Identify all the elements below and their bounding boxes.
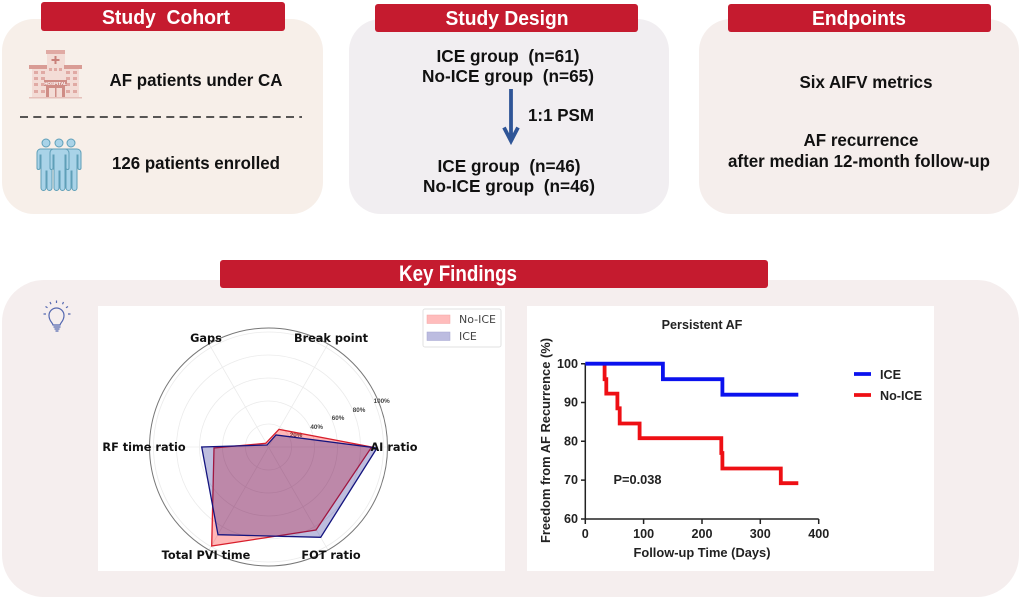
radar series: ICE (202, 435, 377, 537)
icon: hospital: HOSPITAL (44, 81, 67, 86)
p value: P=0.038 (614, 473, 662, 487)
heading: key findings (220, 260, 768, 288)
text: groups before matching (422, 46, 594, 86)
icon: hospital (29, 50, 82, 98)
arrow: propensity score matching (504, 89, 518, 141)
icon: light bulb (44, 300, 70, 331)
text: AF patients under CA: AF patients under CA (110, 70, 283, 90)
text: groups after matching: ICE group (n=46) (438, 156, 580, 176)
y tick labels: 90 (564, 396, 578, 410)
heading: endpoints (728, 4, 991, 32)
x tick labels: 100 (633, 527, 654, 541)
radar axis labels: Total PVI time (162, 549, 251, 562)
radar axis labels: RF time ratio (102, 441, 186, 454)
panel: study cohort (2, 2, 323, 214)
chart legend (854, 368, 922, 403)
icon: group of people (37, 139, 81, 191)
heading: study cohort (41, 2, 285, 31)
x tick labels (582, 527, 829, 541)
heading: endpoints: Endpoints (812, 8, 906, 30)
y axis title: Freedom from AF Recurrence (%) (539, 338, 553, 543)
radial tick labels: 40% (310, 424, 323, 431)
x axis title: Follow-up Time (Days) (634, 546, 770, 560)
radar axis labels: Gaps (190, 332, 222, 345)
survival curve: ICE (585, 364, 798, 395)
x tick labels: 0 (582, 527, 589, 541)
x tick labels: 300 (750, 527, 771, 541)
text: groups before matching: ICE group (n=61) (436, 46, 580, 66)
radial tick labels: 20% (290, 432, 303, 439)
radar legend: No-ICE (459, 313, 496, 326)
text: AF recurrence: after median 12-month follow-up (728, 151, 990, 171)
radar grid (150, 332, 388, 562)
axes with ticks (581, 364, 819, 524)
radar legend (423, 309, 501, 347)
radial tick labels: 60% (332, 415, 345, 422)
text: 126 patients enrolled: 126 patients enrolled (112, 153, 280, 173)
text: six AIFV metrics: Six AIFV metrics (800, 72, 933, 92)
radar axis labels: Break point (294, 332, 369, 345)
survival curve: No-ICE (605, 364, 798, 483)
chart legend: ICE (880, 368, 901, 382)
heading: study design: Study Design (446, 8, 568, 30)
y tick labels: 70 (564, 473, 578, 487)
y tick labels: 80 (564, 434, 578, 448)
panel: radar chart (98, 306, 505, 571)
y tick labels: 60 (564, 512, 578, 526)
heading: study design (375, 4, 638, 32)
text: AF recurrence (728, 130, 990, 171)
chart legend: No-ICE (880, 389, 922, 403)
x tick labels: 200 (691, 527, 713, 541)
panel: survival chart (527, 306, 934, 571)
chart title: Persistent AF (662, 318, 743, 332)
heading: study cohort: Study Cohort (102, 7, 230, 29)
radial tick labels (290, 398, 390, 439)
radial tick labels: 80% (353, 407, 366, 414)
radar axis labels: FOT ratio (301, 549, 361, 562)
heading: key findings: Key Findings (399, 261, 517, 286)
panel: study design (349, 4, 669, 214)
panel: endpoints (699, 4, 1019, 214)
radar legend: ICE (459, 330, 477, 343)
text: groups after matching: No-ICE group (n=46) (423, 176, 595, 196)
panel: key findings (2, 260, 1019, 597)
radar outer ring (150, 328, 388, 566)
text: AF recurrence: AF recurrence (804, 130, 919, 150)
radial tick labels: 100% (374, 398, 390, 405)
x tick labels: 400 (808, 527, 829, 541)
text: groups before matching: No-ICE group (n=65) (422, 66, 594, 86)
text: 1:1 PSM: 1:1 PSM (528, 105, 594, 125)
y tick labels (557, 357, 578, 526)
radar series: No-ICE (212, 429, 372, 546)
radar axis labels: AI ratio (370, 441, 418, 454)
text: groups after matching (423, 156, 595, 196)
radar axis labels (102, 332, 418, 562)
y tick labels: 100 (557, 357, 578, 371)
